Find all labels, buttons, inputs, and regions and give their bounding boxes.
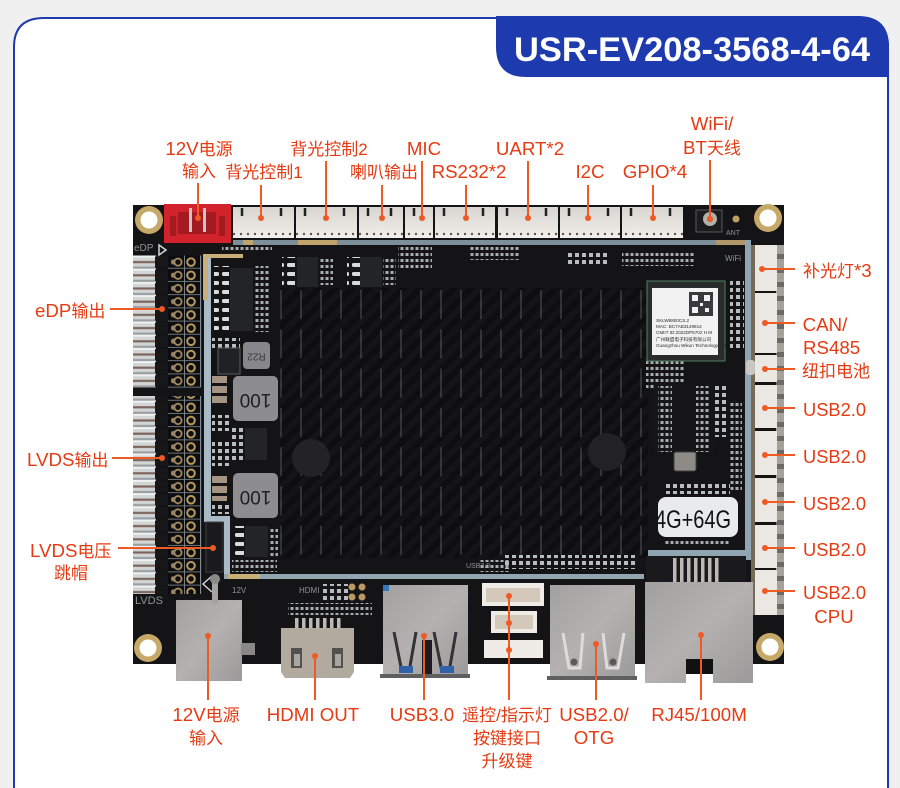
label: 12V power in line 2: 输入 [182,162,216,181]
label: USB2.0 e: USB2.0 [803,582,866,603]
USB 2.0 port [547,585,637,680]
label: WiFi: WiFi/ [691,113,734,134]
12V power jack [176,574,255,681]
silk labels: USB3.0 [466,563,490,570]
module label text: CMIIT ID:2022DP5702 H M [656,330,712,335]
right labels [802,260,872,627]
bottom labels [172,704,747,771]
label: remote and indicator: 遥控/指示灯 [462,706,552,725]
label: speaker output: 喇叭输出 [350,163,418,182]
left SMD chip [206,266,278,572]
label: GPIO: GPIO*4 [623,161,687,182]
title banner: USR-EV208-3568-4-64 [514,31,870,69]
label: CPU: CPU [814,606,854,627]
top connectors [233,207,683,238]
red power connector [164,204,231,243]
module label text: Guangzhou Wikun Technology Ltd [656,343,726,348]
inductor 100 upper [233,376,278,421]
board substrate [133,205,784,664]
label: key interface: 按键接口 [473,729,541,748]
label: MIC: MIC [407,138,441,159]
label: RJ45: RJ45/100M [651,704,747,725]
top labels [165,113,741,182]
label: input: 输入 [189,729,223,748]
module label text: 广州联盟电子科技有限公司 [656,336,712,343]
label: fill light: 补光灯*3 [803,260,872,281]
inductor R22: R22 [247,350,266,361]
silk labels: 12V [232,586,247,595]
label: USB2.0 a: USB2.0 [803,399,866,420]
label: RS485: RS485 [803,337,860,358]
memory label 4G+64G [655,497,738,537]
silk labels: HDMI [299,586,319,595]
mounting holes [134,204,784,662]
WiFi module [647,281,726,361]
label: UART: UART*2 [496,138,564,159]
silk labels: ANT [726,230,741,237]
USB 3.0 port [380,585,470,678]
label: USB2.0 b: USB2.0 [803,446,866,467]
label: upgrade key: 升级键 [482,752,532,771]
module label text [656,318,726,348]
label: LVDS voltage: LVDS电压 [30,540,111,561]
silk labels: eDP [134,243,154,254]
QR code [689,292,713,316]
RJ45 port [645,582,753,683]
inductor 100 lower [233,473,278,518]
label: backlight control 1: 背光控制1 [225,163,303,182]
label: BT antenna: BT天线 [683,137,741,158]
silk labels: WiFi [725,254,741,263]
antenna connector [696,210,740,232]
inductor R22 [243,342,270,369]
label: USB2.0 OTG: USB2.0/ [559,704,630,725]
memory label 4G+64G: 4G+64G [655,506,731,534]
right side connectors [746,245,784,615]
label: eDP output: eDP输出 [35,300,105,321]
label: 12V power input: 12V电源 [172,704,240,725]
heatsink [280,272,648,558]
silk labels: LVDS [135,595,163,607]
trace strips [203,240,751,579]
label: jumper: 跳帽 [54,564,88,583]
HDMI port [281,618,354,678]
title banner [496,16,889,77]
inductor 100 upper: 100 [240,389,271,410]
callout lines and dots [110,160,795,700]
left labels [27,300,111,583]
inductor 100 lower: 100 [240,486,271,507]
module label text: MAC: BC7AB3149814 [656,324,702,329]
label: HDMI OUT: HDMI OUT [267,704,359,725]
label: USB3.0: USB3.0 [390,704,454,725]
label: CAN: CAN/ [803,314,848,335]
label: 12V power in: 12V电源 [165,138,233,159]
module label text: SKLW8800CS.2 [656,318,690,323]
label: OTG: OTG [574,727,614,748]
bottom silk components [288,555,635,615]
left pin headers [133,256,203,594]
label: LVDS output: LVDS输出 [27,449,108,470]
label: I2C: I2C [575,161,605,182]
label: RS232: RS232*2 [432,161,506,182]
silk labels [134,230,741,607]
right lower circuits [646,280,746,584]
label: USB2.0 d: USB2.0 [803,539,866,560]
label: USB2.0 c: USB2.0 [803,493,866,514]
top SMD components [222,245,694,288]
circuit board [133,204,784,683]
white control connectors [482,583,544,658]
label: backlight control 2: 背光控制2 [290,140,368,159]
label: coin battery: 纽扣电池 [802,362,870,381]
